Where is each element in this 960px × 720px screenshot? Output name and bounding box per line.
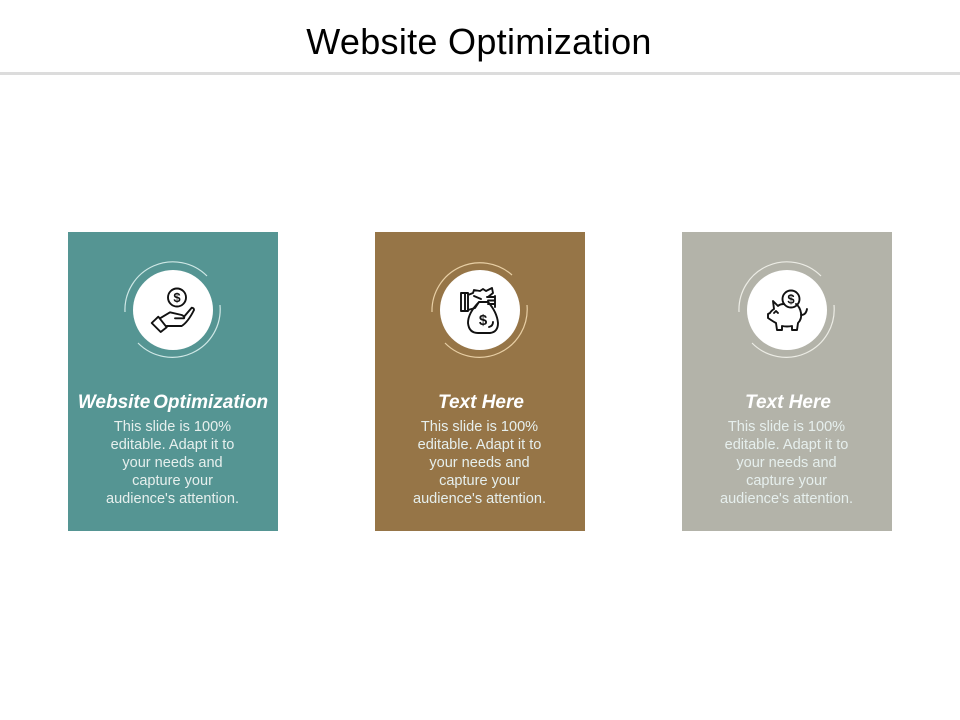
icon: money bag in ring (431, 262, 528, 358)
icon: hand with dollar coin in ring: $ (173, 290, 181, 305)
body text (413, 419, 546, 507)
icon: piggy bank with coin in ring (738, 261, 835, 358)
heading: Text Here (438, 392, 524, 413)
body text: This slide is 100% (728, 419, 845, 435)
body text: your needs and (122, 455, 223, 471)
heading: Website Optimization (78, 392, 268, 413)
body text: editable. Adapt it to (111, 437, 234, 453)
panel: website optimization (68, 232, 278, 531)
title: Website Optimization (306, 21, 652, 62)
body text (106, 419, 239, 507)
body text: capture your (132, 473, 213, 489)
body text: This slide is 100% (421, 419, 538, 435)
body text: audience's attention. (106, 491, 239, 507)
body text: This slide is 100% (114, 419, 231, 435)
body text: audience's attention. (720, 491, 853, 507)
panel: text here gray (682, 232, 892, 531)
icon: money bag in ring: $ (479, 312, 488, 329)
icon: piggy bank with coin in ring: $ (787, 292, 795, 306)
body text: capture your (439, 473, 520, 489)
body text: editable. Adapt it to (725, 437, 848, 453)
body text: capture your (746, 473, 827, 489)
body text: audience's attention. (413, 491, 546, 507)
body text: your needs and (736, 455, 837, 471)
body text: editable. Adapt it to (418, 437, 541, 453)
icon: hand with dollar coin in ring (124, 261, 221, 358)
body text: your needs and (429, 455, 530, 471)
heading: Text Here (745, 392, 831, 413)
body text (720, 419, 853, 507)
panel: text here brown (375, 232, 585, 531)
